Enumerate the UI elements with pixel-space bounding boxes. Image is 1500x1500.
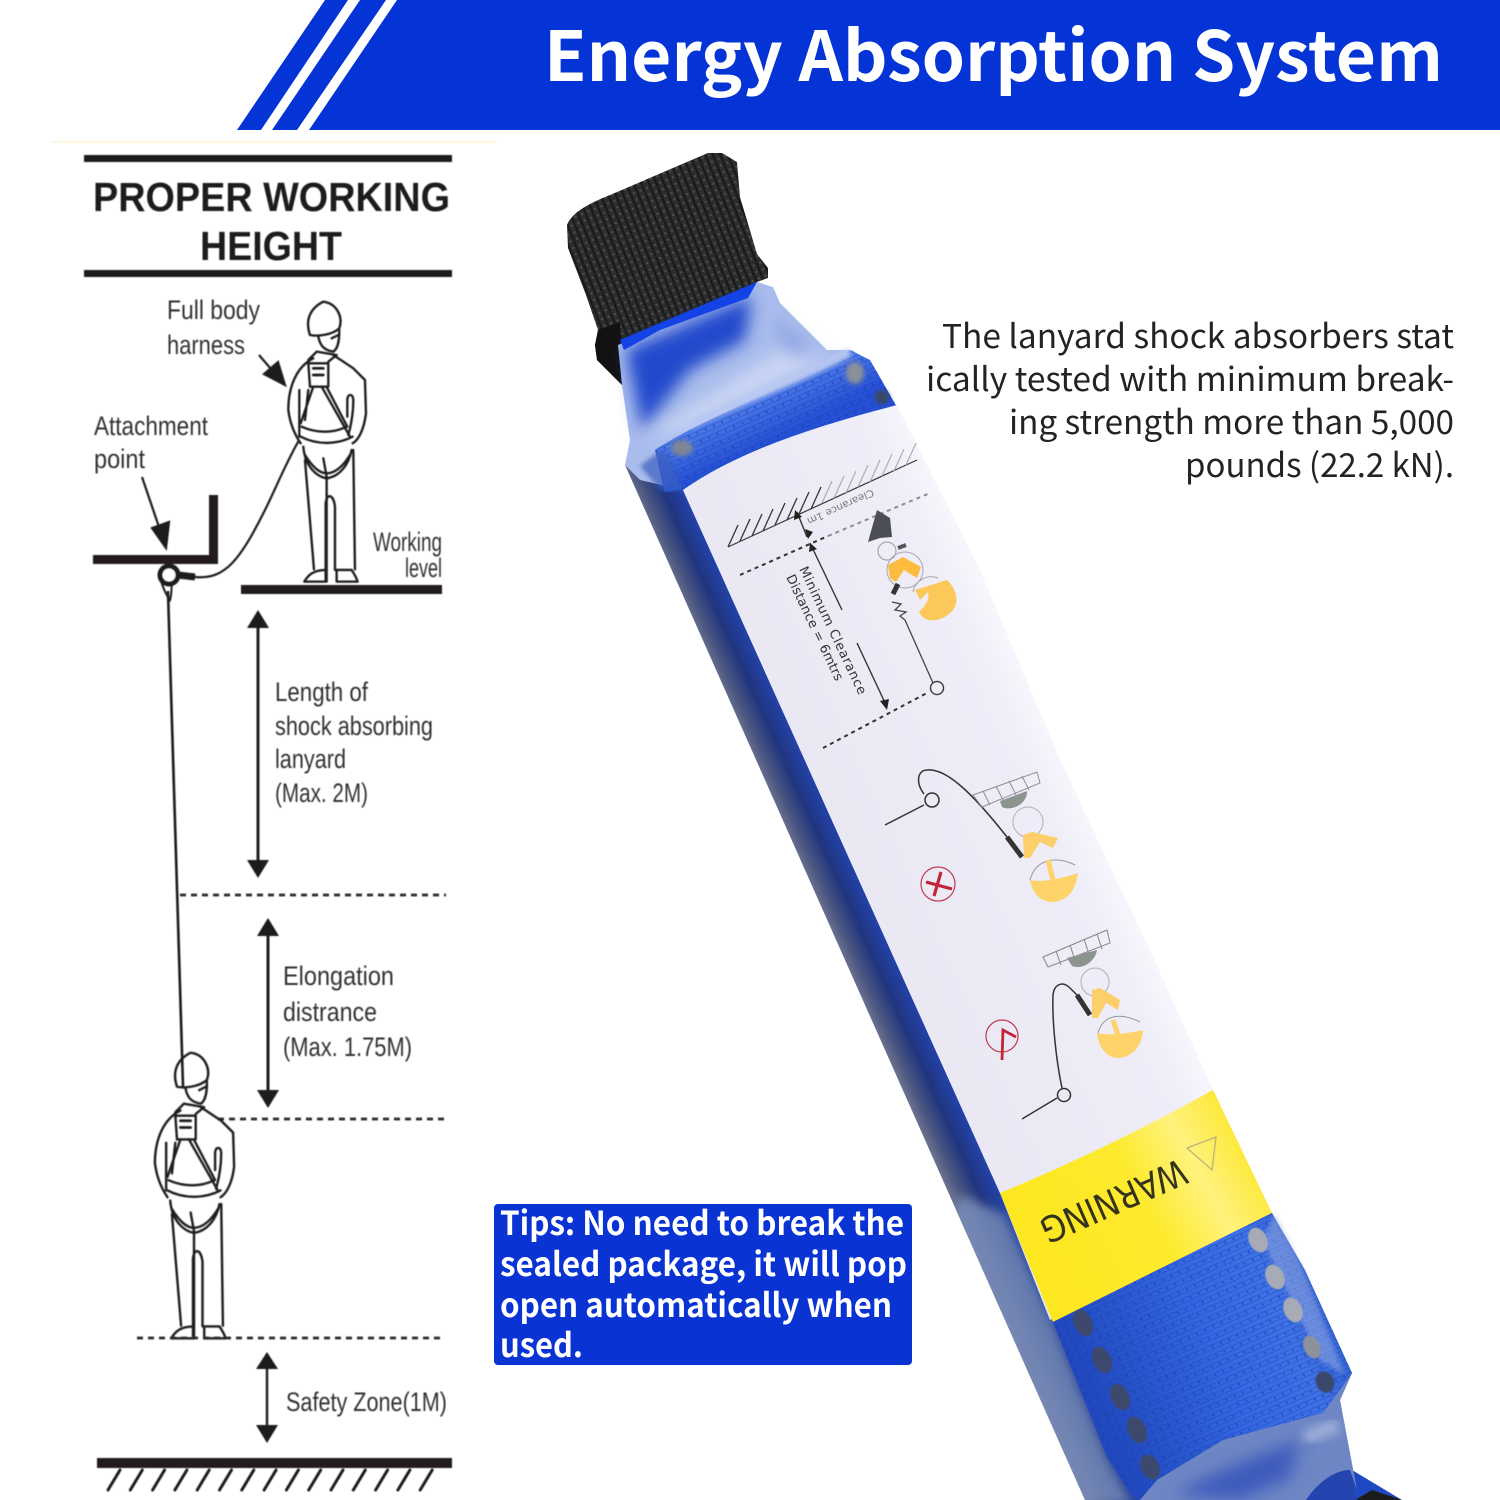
ground with hatching bbox=[97, 1458, 452, 1490]
label: full body harness: Full body bbox=[167, 295, 260, 325]
drawing: minimum clearance bbox=[728, 443, 956, 748]
icon: warning triangle bbox=[1187, 1137, 1216, 1170]
arrow: harness pointer bbox=[259, 355, 285, 385]
tips callout: sealed package, it will pop bbox=[500, 1238, 907, 1286]
arrow: attachment pointer bbox=[142, 477, 169, 548]
black sleeve bbox=[567, 153, 768, 385]
diagram heading bbox=[84, 155, 452, 277]
anchor ring bbox=[160, 566, 195, 600]
warning text: WARNING bbox=[1034, 1150, 1193, 1250]
translucent neck bbox=[618, 282, 897, 490]
label: full body harness: harness bbox=[167, 330, 245, 360]
label: working level bbox=[373, 527, 442, 583]
text: distance: Distance = 6mtrs bbox=[782, 572, 846, 684]
header blue bar bbox=[309, 0, 1500, 130]
label: shock absorbing lanyard length: shock absorbing bbox=[275, 711, 433, 741]
label: elongation distance: (Max. 1.75M) bbox=[283, 1032, 412, 1062]
label: attachment point: Attachment bbox=[94, 411, 208, 441]
label: attachment point: point bbox=[94, 444, 145, 474]
working level floor bbox=[241, 585, 442, 594]
figure: worker after fall bbox=[155, 1053, 234, 1338]
text: minimum clearance: Minimum Clearance bbox=[795, 564, 869, 697]
label: shock absorbing lanyard length bbox=[275, 677, 433, 808]
description text: ically tested with minimum break- bbox=[926, 353, 1454, 401]
label: full body harness bbox=[167, 295, 260, 360]
anchor bracket bbox=[93, 495, 218, 564]
lanyard from anchor to worker bbox=[195, 442, 298, 577]
header banner bbox=[237, 0, 1500, 130]
label: safety zone: Safety Zone(1M) bbox=[286, 1387, 447, 1417]
label: shock absorbing lanyard length: Length of bbox=[275, 677, 368, 707]
arrow: safety zone bbox=[256, 1352, 278, 1443]
diagram heading: PROPER WORKING bbox=[93, 174, 450, 220]
header stripe left bbox=[237, 0, 348, 130]
lower left edge bbox=[950, 1195, 1133, 1500]
warning band bbox=[1000, 1090, 1272, 1322]
drawing: incorrect anchor bbox=[885, 770, 1078, 902]
diagram heading: HEIGHT bbox=[200, 223, 342, 269]
text: clearance: Clearance 1m bbox=[805, 486, 875, 526]
instruction label bbox=[683, 405, 1270, 1320]
bottom strap bbox=[1306, 1470, 1402, 1500]
label: shock absorbing lanyard length: lanyard bbox=[275, 744, 346, 774]
description text: ing strength more than 5,000 bbox=[1009, 396, 1454, 444]
icon: red check bbox=[986, 1020, 1018, 1060]
lanyard body bbox=[625, 465, 1357, 1500]
blue collar band bbox=[620, 282, 757, 350]
description text: The lanyard shock absorbers stat bbox=[942, 310, 1454, 358]
drawing: correct anchor bbox=[986, 930, 1143, 1119]
label: elongation distance: distrance bbox=[283, 997, 377, 1027]
panel: proper working height diagram bbox=[84, 155, 452, 1490]
product photo: shock absorber lanyard bbox=[567, 153, 1402, 1500]
label: shock absorbing lanyard length: (Max. 2M) bbox=[275, 778, 368, 808]
tips callout bbox=[494, 1197, 912, 1367]
description text bbox=[926, 310, 1454, 487]
lower translucent neck bbox=[1140, 1373, 1357, 1500]
label: working level: Working bbox=[373, 527, 442, 557]
description text: pounds (22.2 kN). bbox=[1185, 439, 1454, 487]
title: Energy Absorption System bbox=[544, 1, 1443, 101]
tips callout: open automatically when bbox=[500, 1279, 892, 1327]
woven band above label bbox=[655, 350, 897, 492]
woven webbing bbox=[1053, 1213, 1352, 1500]
tips callout: used. bbox=[500, 1319, 583, 1367]
label: elongation distance: Elongation bbox=[283, 961, 394, 991]
label: working level: level bbox=[405, 553, 442, 583]
tips callout: Tips: No need to break the bbox=[500, 1197, 904, 1245]
arrow: elongation distance bbox=[257, 918, 279, 1108]
figure: worker standing bbox=[288, 302, 366, 582]
label: elongation distance bbox=[283, 961, 412, 1062]
arrow: lanyard length bbox=[247, 610, 269, 878]
label: attachment point bbox=[94, 411, 208, 474]
vertical rope bbox=[168, 592, 183, 1086]
icon: red cross bbox=[921, 867, 955, 901]
header stripe right bbox=[272, 0, 386, 130]
